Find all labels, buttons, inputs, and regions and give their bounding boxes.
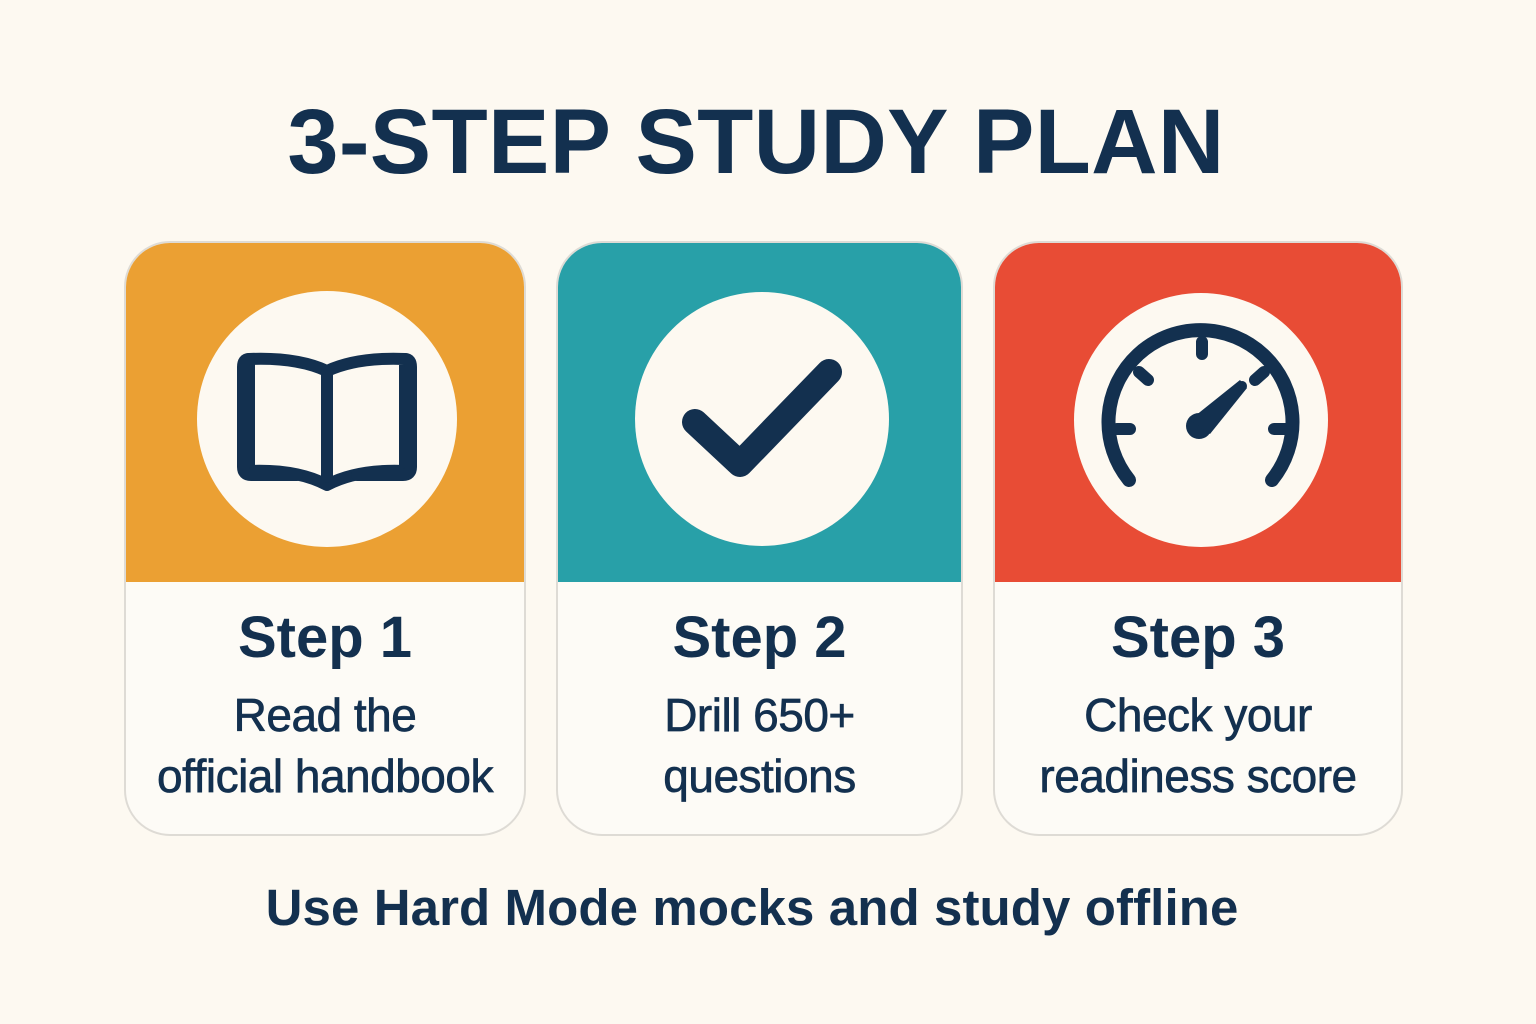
icon: gauge xyxy=(1074,293,1328,547)
text: step 2 description: Drill 650+ xyxy=(664,689,855,741)
text: step 1 description xyxy=(157,689,494,802)
heading: Step 1: Step 1 xyxy=(238,605,412,670)
title: 3-STEP STUDY PLAN xyxy=(287,91,1225,193)
text: step 3 description: Check your xyxy=(1084,689,1312,741)
text: step 3 description xyxy=(1039,689,1357,802)
text: step 3 description: readiness score xyxy=(1039,750,1357,802)
text: step 2 description xyxy=(663,689,856,802)
color header teal xyxy=(556,241,963,582)
color header red xyxy=(993,241,1403,582)
text: step 1 description: official handbook xyxy=(157,750,493,802)
text: step 2 description: questions xyxy=(663,750,856,802)
footer text: Use Hard Mode mocks and study offline xyxy=(266,879,1238,936)
panel: step 3 xyxy=(993,241,1403,836)
heading: Step 2: Step 2 xyxy=(672,605,847,670)
icon: book xyxy=(197,291,457,547)
color header orange xyxy=(124,241,526,582)
icon: checkmark xyxy=(635,292,889,546)
panel: step 2 xyxy=(556,241,963,836)
panel: step 1 xyxy=(124,241,526,836)
heading: Step 3: Step 3 xyxy=(1111,605,1285,670)
text: step 1 description: Read the xyxy=(234,689,416,741)
